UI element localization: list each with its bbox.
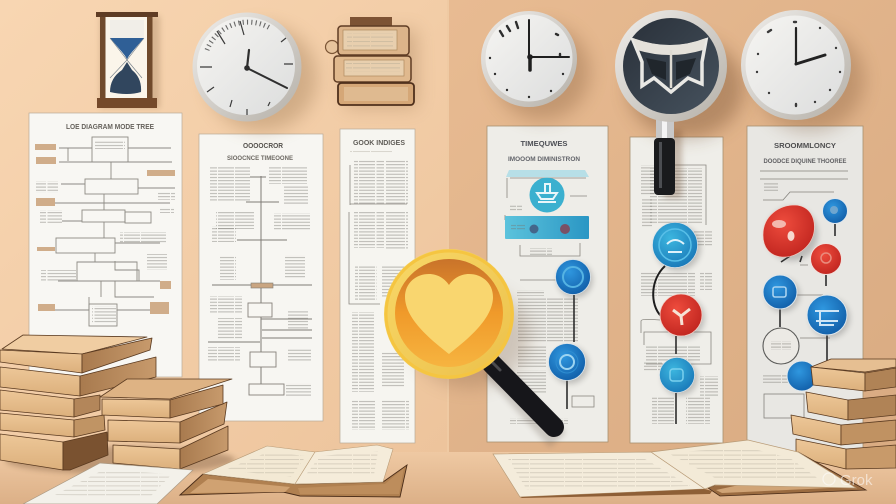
panel: document flowchart xyxy=(29,113,182,377)
panel: tall document behind magnifier xyxy=(630,137,723,443)
background wall: left panel xyxy=(0,0,447,454)
book G xyxy=(108,402,227,443)
icon: book stack small xyxy=(326,17,417,108)
subheading: pins document: DOODCE DIQUINE THOOREE xyxy=(764,158,847,165)
document rules xyxy=(520,243,594,407)
icon: blue pin upper xyxy=(556,260,593,298)
flowchart lines and boxes xyxy=(40,137,175,326)
button pins: doc 6 xyxy=(763,198,850,391)
icon: wall clock right xyxy=(741,10,864,132)
heading: columns: GOOK INDIGES xyxy=(353,140,405,147)
book A xyxy=(0,335,152,373)
teal band xyxy=(505,216,589,239)
column text blocks xyxy=(352,160,409,430)
icon: blue pin lower xyxy=(548,344,589,384)
icon: blue pin calendar xyxy=(763,275,800,312)
icon: magnifier dark xyxy=(615,10,744,198)
book 2 xyxy=(806,392,896,420)
book 1 xyxy=(811,359,896,391)
icon: teal pin xyxy=(660,358,698,396)
watermark: Grok xyxy=(823,472,873,489)
heading: pins document: SROOMMLONCY xyxy=(774,141,836,150)
timeline boxes xyxy=(248,303,284,395)
small text blocks xyxy=(36,140,175,324)
book E xyxy=(0,432,108,470)
tan labels xyxy=(35,144,175,314)
subheading: teal document: IMOOOM DIMINISTRON xyxy=(508,156,580,163)
icon: outline circle xyxy=(763,328,799,364)
icon: hourglass xyxy=(96,12,160,108)
book stack: left xyxy=(0,335,235,474)
panel: document text columns xyxy=(340,129,415,443)
teal rule and frame xyxy=(505,178,587,220)
icon: yellow magnifier with heart xyxy=(384,249,558,440)
icon: blue pin small xyxy=(822,198,848,224)
icon: blue pin partly hidden xyxy=(787,361,817,391)
watermark: Grok: Grok xyxy=(840,472,873,489)
book stack: right xyxy=(791,359,896,469)
timeline tan tag xyxy=(251,283,273,288)
book F xyxy=(100,379,232,418)
subheading: timeline: SIOOCNCE TIMEOONE xyxy=(227,155,294,162)
timeline spine xyxy=(208,176,312,385)
pins document text xyxy=(763,183,790,383)
tall document frames xyxy=(641,165,711,364)
icon: red pin xyxy=(660,294,705,339)
icon: teal circle xyxy=(530,178,564,212)
book C xyxy=(0,390,100,417)
open book: left xyxy=(180,445,407,497)
panel: document with teal band xyxy=(487,126,608,442)
timeline text blocks xyxy=(208,166,312,396)
icon: blue pin large xyxy=(652,222,701,271)
book H xyxy=(113,426,228,469)
icon: red pin small xyxy=(810,244,842,274)
heading: flowchart: LOE DIAGRAM MODE TREE xyxy=(66,124,154,131)
panel: document with red and blue pins xyxy=(747,126,863,452)
icon: red pin large xyxy=(763,205,818,261)
tall document text xyxy=(640,165,718,424)
panel: document timeline xyxy=(199,134,323,421)
button pins: doc 4 xyxy=(548,260,593,409)
icon: wall clock centre xyxy=(481,11,590,120)
book 4 xyxy=(796,439,896,469)
heading: teal document: TIMEQUWES xyxy=(520,139,568,148)
open book: right xyxy=(493,440,866,498)
pins document rules xyxy=(760,171,848,370)
book 3 xyxy=(791,415,896,445)
book D xyxy=(0,413,105,437)
teal document text xyxy=(510,204,578,424)
loose paper sheet xyxy=(23,463,193,504)
background wall: right panel xyxy=(449,0,896,454)
wooden table xyxy=(0,452,896,504)
heading: timeline: OOOOCROR xyxy=(243,141,284,150)
icon: wall clock left xyxy=(192,12,317,131)
shadow of stack xyxy=(5,446,235,474)
column rules xyxy=(349,165,407,304)
book B xyxy=(0,357,156,396)
icon: blue pin browser xyxy=(807,295,850,338)
button pins: doc 5 xyxy=(652,222,705,424)
